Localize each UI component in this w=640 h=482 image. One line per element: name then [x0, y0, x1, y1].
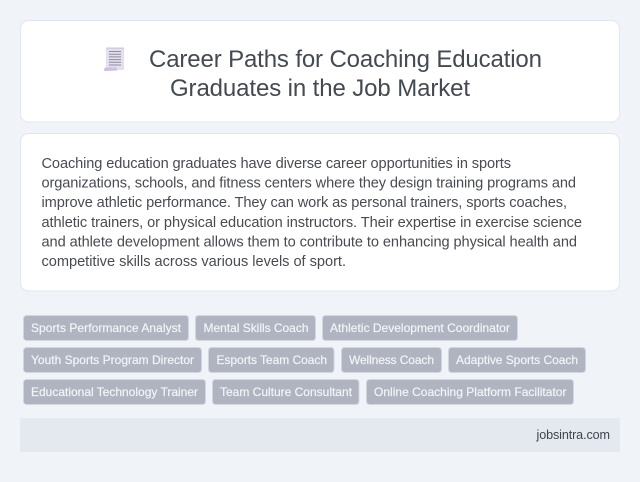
tag: Wellness Coach [342, 348, 442, 372]
tag: Adaptive Sports Coach [448, 348, 586, 372]
tag: Educational Technology Trainer: Educational Technology Trainer [31, 385, 198, 399]
tag: Sports Performance Analyst [24, 316, 188, 340]
text block: description: organizations, schools, and fitness centers where they design training programs and [42, 176, 576, 192]
text block: description: Coaching education graduates have diverse career opportunities in sports [42, 156, 511, 172]
panel: description [20, 134, 620, 291]
text block: description [42, 156, 582, 270]
tag: Sports Performance Analyst: Sports Performance Analyst [31, 321, 182, 335]
tag: Team Culture Consultant [212, 380, 359, 404]
footer: site name: jobsintra.com [536, 428, 610, 442]
tag list [24, 316, 586, 404]
text block: description: competitive skills across various levels of sport. [42, 254, 346, 270]
tag: Athletic Development Coordinator: Athletic Development Coordinator [330, 321, 510, 335]
tag: Athletic Development Coordinator [322, 316, 518, 340]
panel: header [20, 20, 620, 122]
tag: Online Coaching Platform Facilitator [366, 380, 574, 404]
footer [20, 418, 620, 452]
tag: Online Coaching Platform Facilitator: Online Coaching Platform Facilitator [374, 385, 566, 399]
text block: description: athletic trainers, or physical education instructors. Their expertise in exercise science [42, 215, 582, 231]
tag: Mental Skills Coach [196, 316, 316, 340]
text block: description: and athlete development allows them to contribute to enhancing physical health and [42, 234, 577, 250]
tag: Wellness Coach: Wellness Coach [349, 353, 434, 367]
tag: Mental Skills Coach: Mental Skills Coach [204, 321, 308, 335]
tag: Youth Sports Program Director [24, 348, 202, 372]
text block: description: improve athletic performance. They can work as personal trainers, sports coaches, [42, 195, 567, 211]
title: Career Paths for Coaching Education [149, 46, 542, 73]
tag: Esports Team Coach [208, 348, 334, 372]
title [149, 46, 542, 102]
tag: Educational Technology Trainer [24, 380, 206, 404]
tag: Adaptive Sports Coach: Adaptive Sports Coach [456, 353, 578, 367]
tag: Team Culture Consultant: Team Culture Consultant [220, 385, 353, 399]
title: Graduates in the Job Market [170, 75, 470, 102]
tag: Youth Sports Program Director: Youth Sports Program Director [31, 353, 194, 367]
icon: document scroll [104, 48, 124, 71]
tag: Esports Team Coach: Esports Team Coach [216, 353, 327, 367]
